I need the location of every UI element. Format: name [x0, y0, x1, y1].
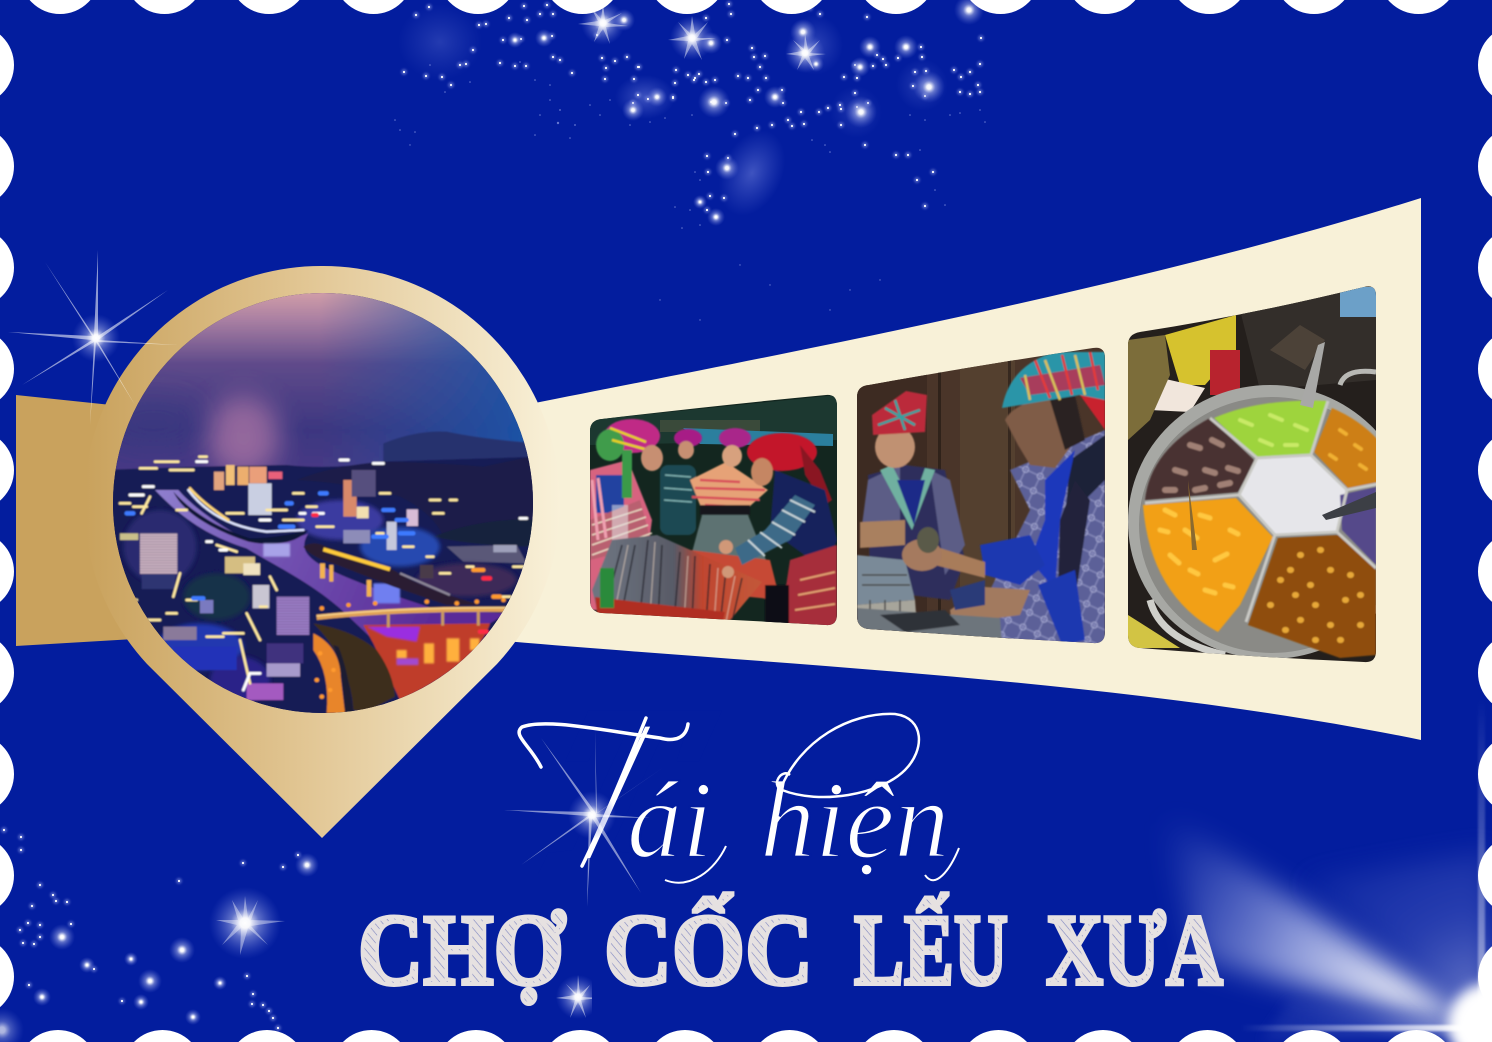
heading: Chợ Cốc Lếu xưa: LẾU: [854, 892, 1008, 1007]
left woman: [590, 460, 652, 610]
river: [154, 488, 502, 636]
script title: Tái hiện: ái: [627, 759, 713, 881]
heading: Chợ Cốc Lếu xưa: XƯA: [1046, 894, 1223, 1007]
hill right: [300, 458, 533, 533]
ground base: [100, 457, 540, 720]
title sparkle: [504, 730, 664, 907]
script title: Tái hiện: hiện: [760, 759, 949, 881]
right woman: [747, 433, 817, 471]
swash: T stem: [582, 718, 646, 866]
left woman: [868, 465, 965, 600]
photo: sweet soup pan: [1128, 286, 1376, 662]
hands: [935, 548, 985, 578]
bank with yellow lights: [303, 543, 480, 605]
heading: Chợ Cốc Lếu xưa: CỐC: [604, 892, 813, 1007]
small sparkle near heading: [556, 976, 592, 1018]
swash: T bar: [519, 724, 688, 767]
gold band behind pin: [16, 395, 150, 646]
swash: tails: [665, 846, 959, 883]
photo: Hmong women with skirt: [590, 394, 838, 626]
table and cloth: [857, 608, 1002, 638]
top star field: [398, 0, 984, 226]
center woman: [688, 462, 769, 507]
buildings: [140, 533, 177, 574]
swash: h loop: [777, 714, 919, 797]
photo: Lao Cai city at night: [113, 293, 533, 713]
river island: [173, 492, 308, 544]
right woman: [985, 430, 1105, 645]
photo: Hmong women at work: [857, 345, 1107, 645]
heading: Chợ Cốc Lếu xưa: [358, 892, 1223, 1007]
bottom left stars: [0, 830, 319, 1042]
main skirt: [592, 535, 762, 625]
cream ribbon panel: [505, 198, 1421, 740]
coloured districts: [157, 623, 243, 670]
reflections in mid river: [320, 563, 371, 597]
pan wedges: [1143, 401, 1378, 658]
table left: [857, 555, 915, 605]
city lights: [120, 457, 523, 683]
sky: [116, 293, 514, 470]
pan rim: [1128, 385, 1376, 658]
faint star dust: [394, 61, 986, 321]
ladles: [1300, 342, 1325, 408]
foreshore hill + road: [313, 623, 395, 712]
bridge: [317, 609, 507, 617]
lower river glow: [363, 623, 490, 700]
script title: Tái hiện: [517, 666, 959, 915]
back woman: [660, 465, 696, 535]
heading: Chợ Cốc Lếu xưa: CHỢ: [358, 894, 565, 1007]
light beam bottom right: [1160, 700, 1492, 1042]
script title: Tái hiện: T: [517, 666, 726, 915]
left sparkle: [8, 250, 178, 425]
map pin: [84, 266, 560, 838]
